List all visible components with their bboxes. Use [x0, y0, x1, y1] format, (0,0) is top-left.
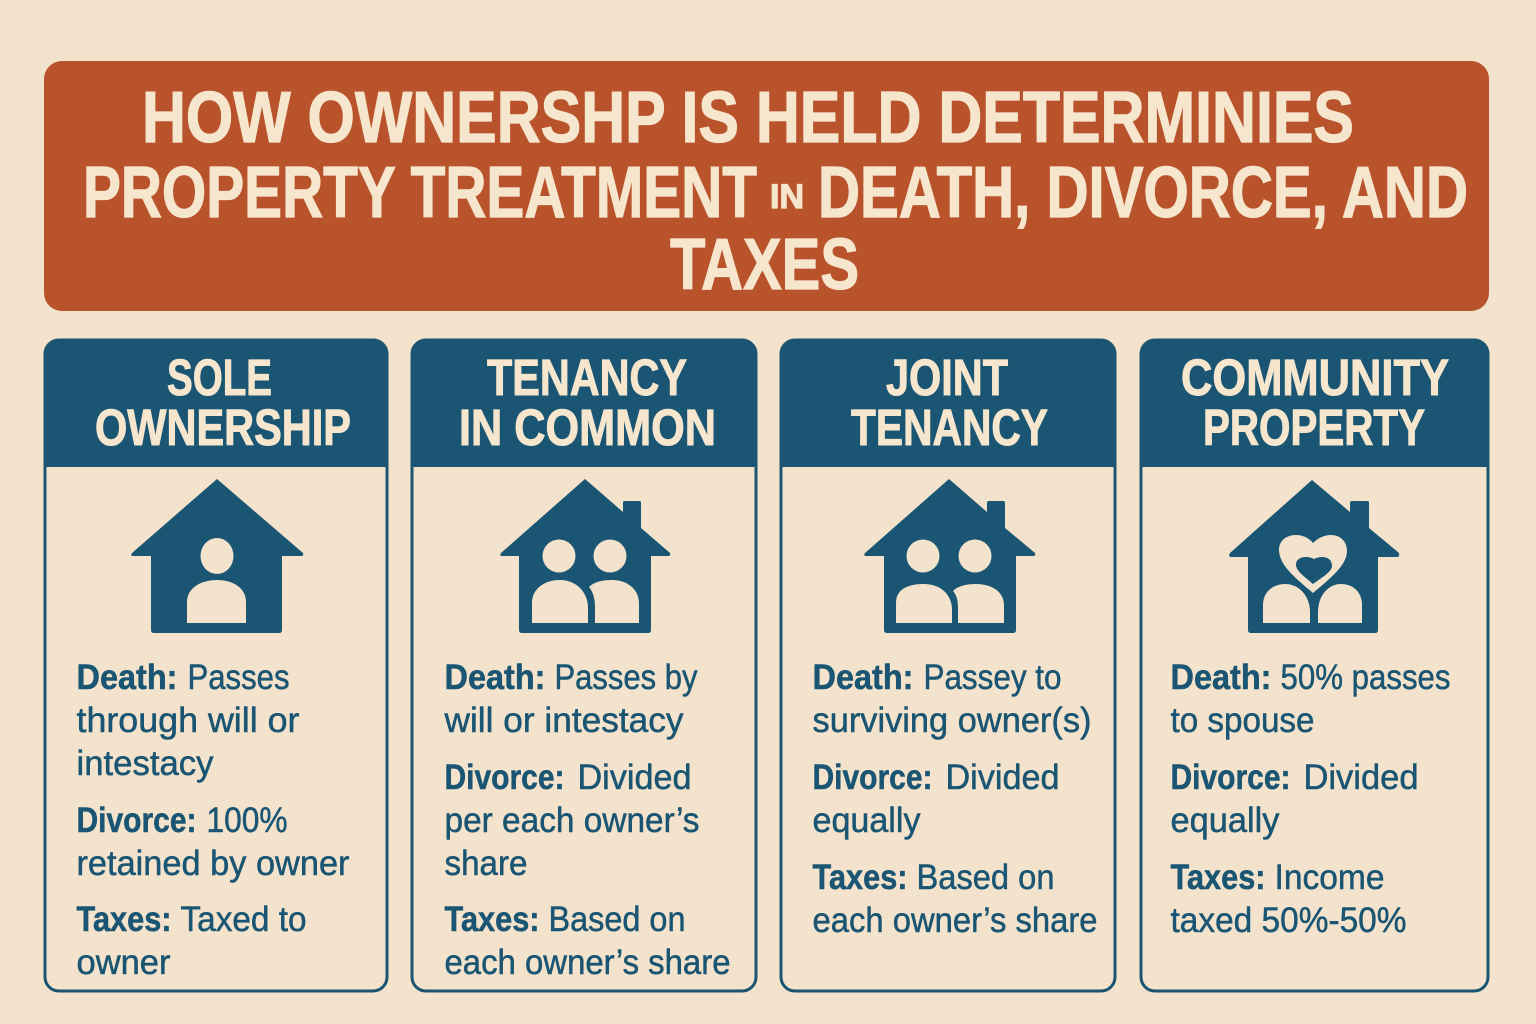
icon: house with one person [131, 479, 303, 633]
text: joint tenancy details: Divorce: [812, 758, 932, 797]
text: community property details: Divided [1304, 758, 1418, 797]
text: joint tenancy details: Passey to [924, 658, 1062, 697]
text: community property details: equally [1170, 801, 1280, 840]
text: joint tenancy details: Death: [812, 658, 914, 697]
heading: tenancy in common: TENANCY [487, 349, 687, 406]
icon: house with heart and two people [1229, 480, 1399, 633]
text: joint tenancy details [812, 658, 1098, 940]
text: sole ownership details: Taxed to [180, 900, 306, 939]
text: community property details: 50% passes [1280, 658, 1450, 697]
text: tenancy in common details: share [444, 844, 528, 883]
text: sole ownership details: Taxes: [76, 900, 172, 939]
text: joint tenancy details: Based on [916, 858, 1054, 897]
title banner [44, 61, 1489, 311]
text: tenancy in common details: Divorce: [444, 758, 564, 797]
panel: tenancy in common [411, 339, 757, 991]
heading: tenancy in common [411, 339, 757, 467]
text: tenancy in common details: will or intestacy [443, 701, 684, 740]
text: community property details [1170, 658, 1450, 940]
title banner: TAXES [670, 225, 859, 305]
heading: community property: PROPERTY [1203, 399, 1425, 456]
text: tenancy in common details: Death: [444, 658, 546, 697]
text: sole ownership details: Death: [76, 658, 178, 697]
heading: joint tenancy: JOINT [886, 349, 1008, 406]
heading: community property [1140, 339, 1489, 467]
text: sole ownership details: 100% [206, 801, 288, 840]
text: community property details: Death: [1170, 658, 1272, 697]
text: community property details: Divorce: [1170, 758, 1290, 797]
heading: community property: COMMUNITY [1181, 349, 1449, 406]
panel: sole ownership [44, 339, 388, 991]
text: tenancy in common details: Taxes: [444, 900, 540, 939]
icon: house with two people [500, 479, 670, 633]
title banner: IN [770, 178, 804, 216]
text: sole ownership details: owner [76, 943, 171, 982]
heading: sole ownership: SOLE [167, 349, 272, 406]
panel: community property [1140, 339, 1489, 991]
heading: tenancy in common: IN COMMON [459, 399, 716, 456]
text: community property details: Income [1274, 858, 1384, 897]
text: sole ownership details [76, 658, 350, 982]
text: tenancy in common details [443, 658, 730, 982]
text: sole ownership details: Divorce: [76, 801, 196, 840]
heading: joint tenancy [780, 339, 1116, 467]
text: community property details: taxed 50%-50% [1170, 901, 1406, 940]
icon: house with two people [864, 479, 1035, 633]
text: tenancy in common details: Divided [578, 758, 692, 797]
text: joint tenancy details: each owner’s share [812, 901, 1098, 940]
text: joint tenancy details: surviving owner(s) [812, 701, 1092, 740]
text: sole ownership details: intestacy [76, 744, 214, 783]
text: tenancy in common details: Passes by [554, 658, 698, 697]
title banner: PROPERTY TREATMENT [83, 153, 757, 233]
text: community property details: to spouse [1170, 701, 1314, 740]
heading: sole ownership: OWNERSHIP [95, 399, 351, 456]
text: sole ownership details: Passes [188, 658, 290, 697]
text: sole ownership details: retained by owner [76, 844, 350, 883]
text: community property details: Taxes: [1170, 858, 1266, 897]
panel: joint tenancy [780, 339, 1116, 991]
text: joint tenancy details: equally [812, 801, 921, 840]
text: joint tenancy details: Divided [946, 758, 1060, 797]
text: joint tenancy details: Taxes: [812, 858, 908, 897]
text: tenancy in common details: each owner’s share [444, 943, 730, 982]
text: tenancy in common details: Based on [548, 900, 686, 939]
heading: joint tenancy: TENANCY [851, 399, 1048, 456]
heading: sole ownership [44, 339, 388, 467]
title banner: HOW OWNERSHP IS HELD DETERMINIES [142, 78, 1354, 158]
text: tenancy in common details: per each owner’s [444, 801, 700, 840]
text: sole ownership details: through will or [76, 701, 300, 740]
